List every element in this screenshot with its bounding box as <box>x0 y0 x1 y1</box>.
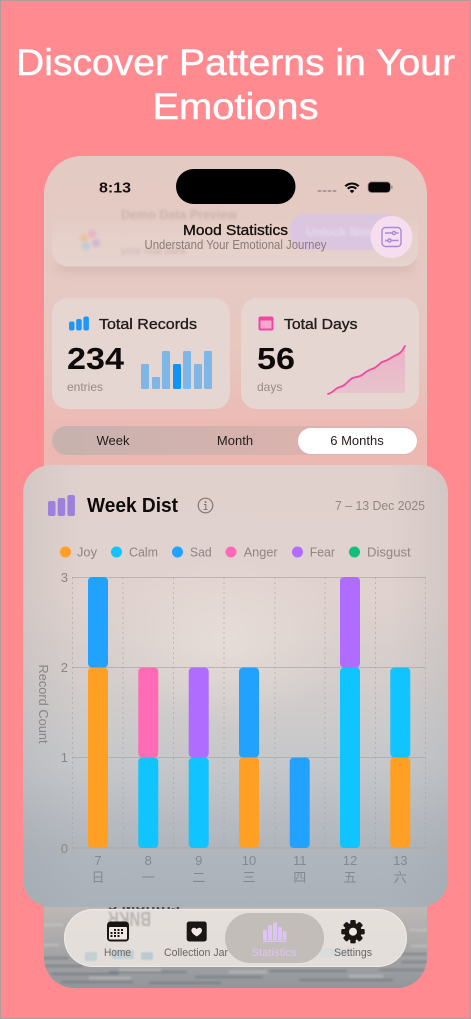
title: Discover Patterns in Your <box>16 41 455 83</box>
header title: Mood Statistics <box>183 223 288 239</box>
mini area chart <box>328 346 405 394</box>
tab: collection jar: Collection Jar <box>164 947 228 959</box>
tab: settings: Settings <box>334 947 372 959</box>
bars day 12 <box>340 577 360 848</box>
bars day 9 <box>189 668 209 848</box>
x axis labels: 二 <box>192 870 205 885</box>
x axis labels: 8 <box>145 853 152 868</box>
ghost content through glass <box>85 907 350 961</box>
y axis labels: 3 <box>61 570 68 585</box>
icon: calendar <box>258 316 274 330</box>
x axis labels: 三 <box>242 870 256 885</box>
phone mockup <box>44 156 427 988</box>
legend: Sad <box>190 544 212 560</box>
tab: home <box>104 922 131 959</box>
unit: days <box>257 380 282 394</box>
bars day 13 <box>390 668 410 848</box>
tab: statistics: Statistics <box>252 947 297 959</box>
x axis labels: 12 <box>343 853 357 868</box>
date range: 7 – 13 Dec 2025 <box>335 499 425 513</box>
y axis labels <box>61 570 68 856</box>
tab: statistics <box>252 922 297 959</box>
filter button <box>370 216 412 258</box>
mini bar chart <box>141 351 212 389</box>
blurred unlock button: Unlock Now <box>306 225 375 239</box>
blurred banner text <box>121 208 237 257</box>
legend: Anger <box>244 544 278 560</box>
x axis labels: 13 <box>393 853 408 868</box>
segment labels: 6 Months <box>330 433 384 448</box>
card heading: Total Days <box>284 316 358 333</box>
tab: collection jar <box>164 922 228 959</box>
x axis labels: 9 <box>195 853 202 868</box>
segment labels: Month <box>217 433 253 448</box>
wifi icon <box>345 184 359 193</box>
card heading: Week Dist <box>87 495 178 517</box>
battery icon <box>368 182 392 193</box>
x axis labels: 11 <box>293 853 306 868</box>
icon: calendar <box>107 922 129 942</box>
x axis labels: 一 <box>142 870 155 885</box>
dynamic island <box>176 169 296 204</box>
icon: bars <box>69 316 89 330</box>
tab bar <box>64 907 407 967</box>
icon: info <box>198 498 213 513</box>
icon: chart bars <box>263 922 286 942</box>
stat card: total records <box>52 298 230 409</box>
segment labels: Week <box>96 433 130 448</box>
unit: entries <box>67 380 103 394</box>
blurred banner text: your real data <box>121 245 185 257</box>
legend: Calm <box>129 544 158 560</box>
selected tab <box>225 913 324 963</box>
selected segment <box>298 428 417 454</box>
stacked bar chart <box>36 570 426 885</box>
icon: sliders <box>382 228 401 246</box>
title <box>16 41 455 127</box>
tab: settings <box>334 920 372 959</box>
card heading: Total Records <box>99 316 197 333</box>
value: 56 <box>257 341 295 376</box>
value: 234 <box>67 341 125 376</box>
icon: heart box <box>187 922 207 942</box>
y axis labels: 2 <box>61 660 68 675</box>
x axis labels <box>91 853 408 885</box>
x axis labels: 10 <box>242 853 256 868</box>
status bar <box>99 169 392 204</box>
legend: Joy <box>77 544 97 560</box>
icon: card bars <box>48 495 75 516</box>
cellular dots <box>318 190 336 192</box>
header subtitle: Understand Your Emotional Journey <box>144 238 327 252</box>
icon: gear <box>341 920 365 943</box>
title: Emotions <box>152 85 318 127</box>
x axis labels: 四 <box>293 870 306 885</box>
bars day 10 <box>239 668 259 848</box>
legend: Fear <box>310 544 336 560</box>
blurred banner logo <box>80 230 100 250</box>
legend <box>60 544 411 560</box>
x axis labels: 六 <box>394 870 407 885</box>
bars day 8 <box>138 668 158 848</box>
blurred banner text: Demo Data Preview <box>121 208 237 222</box>
x axis labels: 五 <box>343 870 357 885</box>
blurred demo banner <box>52 205 418 272</box>
clock: 8:13 <box>99 179 131 196</box>
y axis labels: 1 <box>61 750 68 765</box>
x axis labels: 日 <box>91 870 105 885</box>
stat card: total days <box>241 298 419 409</box>
bars day 7 <box>88 577 108 848</box>
blurred unlock button <box>290 214 400 250</box>
y axis title: Record Count <box>36 664 50 744</box>
segmented control <box>52 426 418 455</box>
sea photo at phone bottom <box>44 906 427 988</box>
ghost content through glass: BNKR <box>108 907 151 929</box>
segment labels <box>96 436 384 445</box>
x axis labels: 7 <box>94 853 102 868</box>
legend: Disgust <box>367 544 411 560</box>
bottom ghost content behind nav: 5 Months <box>108 898 180 913</box>
chart card <box>23 465 448 907</box>
bars day 11 <box>290 758 310 848</box>
y axis labels: 0 <box>61 841 68 856</box>
tab: home: Home <box>104 947 131 959</box>
